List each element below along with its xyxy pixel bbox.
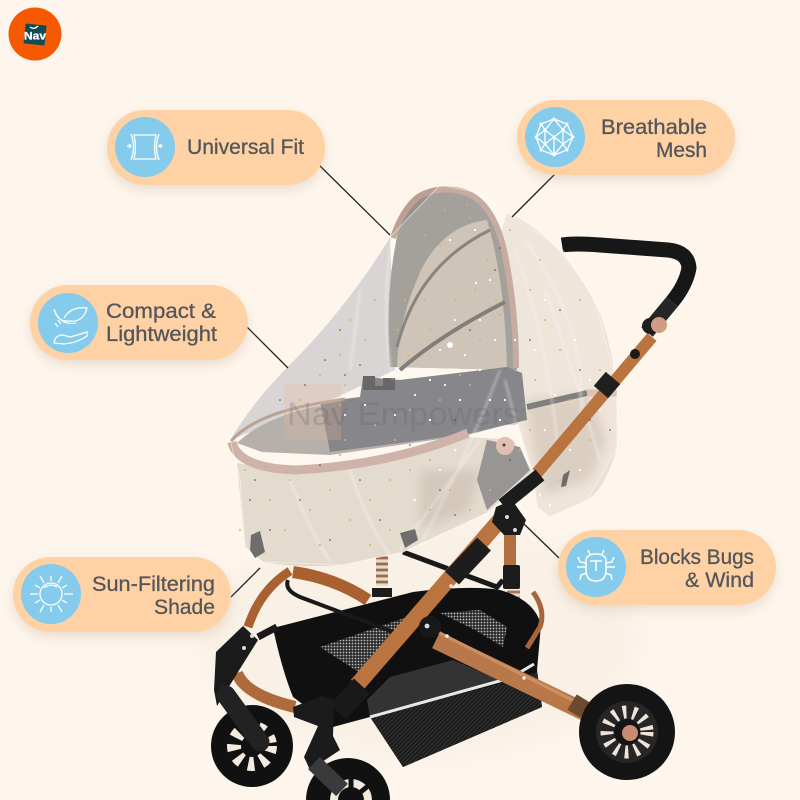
rear wheel — [579, 684, 675, 780]
icon: waist fit — [127, 134, 163, 160]
net gold sequins — [240, 205, 600, 545]
net dark sequins — [250, 248, 610, 540]
label: compact and lightweight — [106, 300, 217, 346]
net clips — [250, 470, 570, 558]
label: blocks bugs and wind — [640, 546, 754, 592]
icon: mesh ball — [536, 119, 573, 155]
icon: feather on hand — [54, 308, 87, 344]
label: sun-filtering shade — [92, 573, 215, 619]
rim of bassinet — [231, 399, 514, 470]
net back shading — [525, 395, 607, 495]
net back fabric — [480, 213, 617, 517]
stroller ground glow — [200, 520, 640, 760]
leader line: universal fit — [317, 163, 390, 235]
label: breathable mesh — [601, 116, 707, 162]
net left fabric over background — [230, 237, 395, 440]
net overlay — [230, 185, 617, 565]
bassinet body shading — [420, 470, 480, 530]
callout: universal fit — [107, 110, 325, 185]
label: universal fit: Universal Fit — [187, 136, 304, 159]
leader line: breathable mesh — [512, 174, 555, 217]
callout: breathable mesh — [517, 100, 735, 175]
label: blocks bugs and wind: & Wind — [685, 569, 754, 592]
net white sequins — [345, 230, 600, 505]
watermark: Nav Empowers — [287, 396, 520, 432]
leader line: compact and lightweight — [247, 327, 288, 368]
logo — [8, 8, 62, 60]
label: sun-filtering shade: Shade — [154, 596, 215, 619]
label: blocks bugs and wind: Blocks Bugs — [640, 546, 754, 569]
callout: blocks bugs and wind — [558, 530, 776, 605]
canopy interior — [388, 189, 517, 370]
front center fork and wheel — [293, 696, 390, 800]
hood arc — [393, 189, 516, 368]
label: compact and lightweight: Lightweight — [106, 323, 217, 346]
bassinet interior — [237, 367, 617, 510]
icon: sun — [30, 576, 73, 612]
basket — [273, 588, 542, 767]
main tubes — [338, 520, 585, 712]
label: compact and lightweight: Compact & — [106, 300, 216, 323]
front left joint and wheel — [211, 626, 293, 787]
stroller illustration — [200, 185, 689, 800]
callout: sun-filtering shade — [13, 557, 231, 632]
label: breathable mesh: Breathable — [601, 116, 707, 139]
watermark — [284, 384, 520, 440]
leader line: blocks bugs and wind — [522, 522, 559, 558]
label: breathable mesh: Mesh — [656, 139, 707, 162]
icon: bug — [577, 550, 615, 581]
handle — [562, 244, 689, 302]
label: sun-filtering shade: Sun-Filtering — [92, 573, 215, 596]
left brown tubes — [237, 552, 503, 707]
net folds — [290, 240, 600, 562]
logo: Nav — [24, 30, 47, 42]
leader line: sun-filtering shade — [231, 568, 260, 597]
bassinet body — [237, 437, 533, 566]
upper tube and joints in front of net — [492, 302, 672, 535]
callout: compact and lightweight — [30, 285, 248, 360]
rear frame and spring — [372, 530, 520, 646]
